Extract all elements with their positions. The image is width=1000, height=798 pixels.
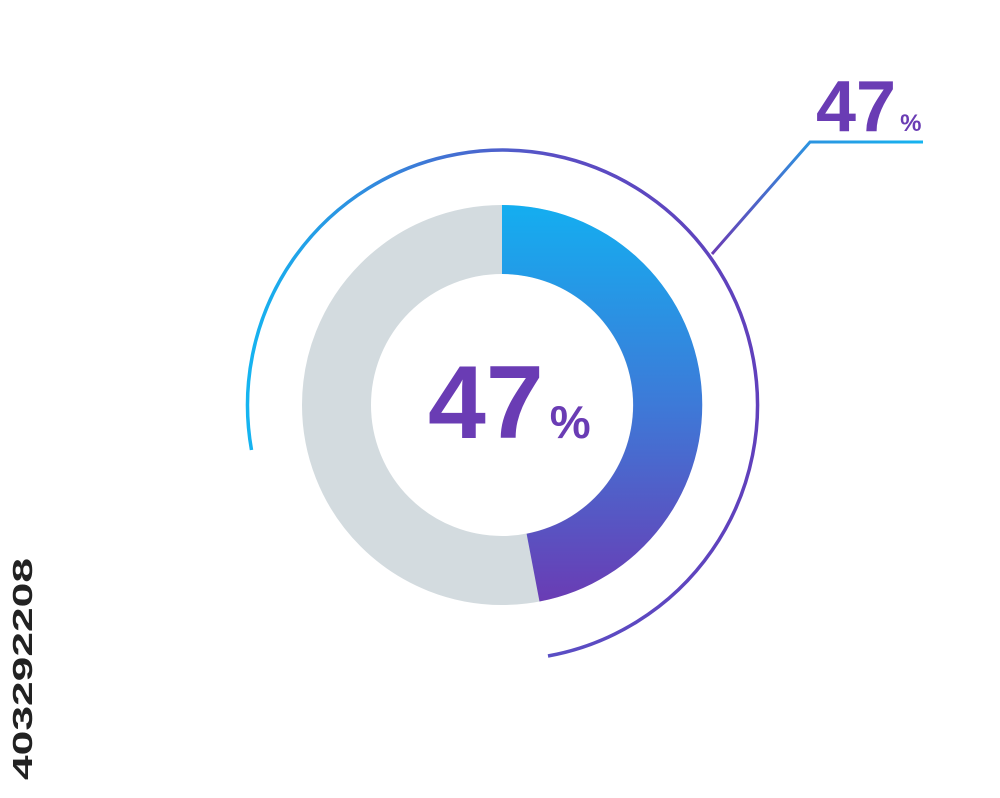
side ID text: 403292208: [7, 558, 38, 780]
donut background ring: [336, 240, 668, 570]
leader line: [712, 142, 923, 254]
center value 47%: 47%: [428, 345, 591, 461]
outer arc: [248, 150, 758, 656]
donut 47% segment: [502, 205, 702, 602]
callout label 47%: 47%: [816, 67, 921, 147]
donut chart: [336, 205, 702, 602]
